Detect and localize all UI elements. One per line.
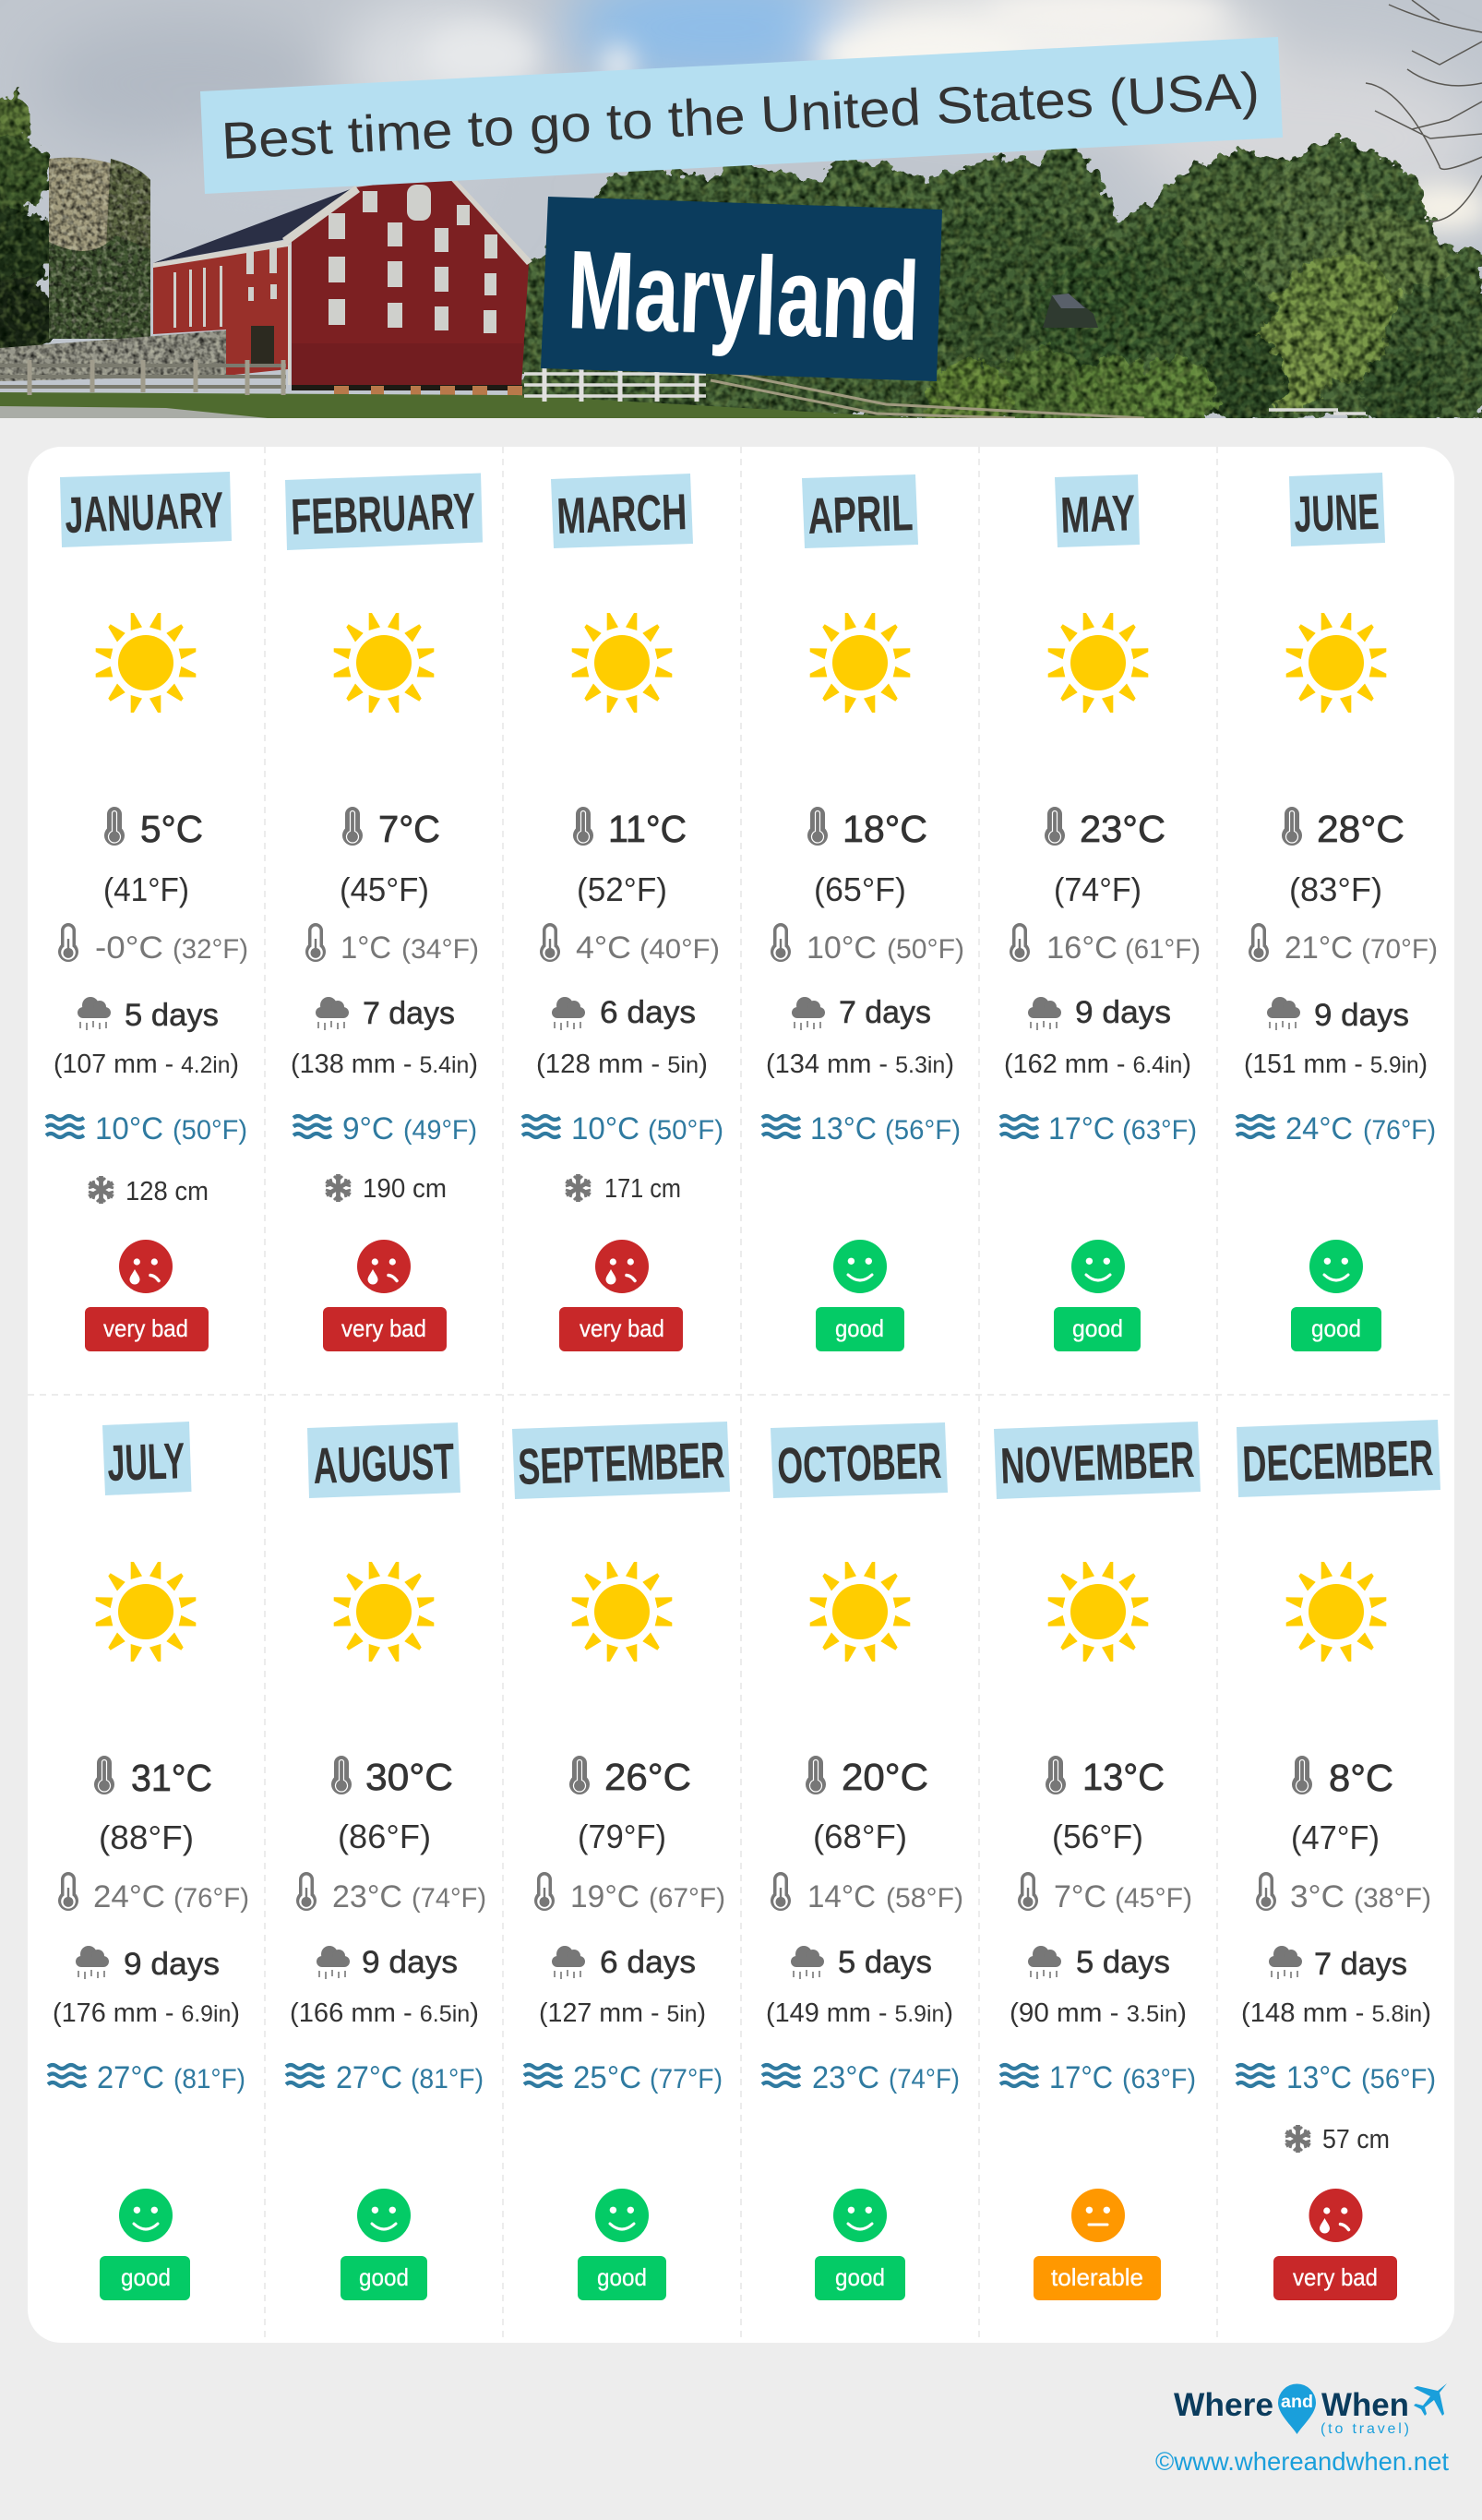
month heading [307, 1422, 460, 1498]
rainy days [552, 1945, 696, 1980]
rainy days: 5 days [838, 1945, 932, 1980]
average temperature [342, 807, 440, 850]
icon: sun [334, 613, 434, 713]
rating badge [1273, 2256, 1397, 2300]
temperature in Fahrenheit: (47°F) [1291, 1818, 1380, 1856]
rainy days: 9 days [1314, 998, 1409, 1033]
snowfall [326, 1174, 447, 1204]
average temperature [806, 1756, 928, 1798]
rainy days: 9 days [362, 1945, 458, 1980]
rating badge: very bad [341, 1314, 426, 1342]
icon: smiling face [833, 1240, 887, 1293]
sea temperature: (76°F) [1363, 1115, 1436, 1146]
panel: March [522, 474, 723, 1351]
temperature in Fahrenheit: (56°F) [1052, 1818, 1143, 1855]
low temperature: (34°F) [401, 934, 479, 965]
sea temperature [524, 2060, 723, 2095]
rating badge: good [835, 1314, 884, 1342]
month heading: FEBRUARY [290, 482, 476, 546]
month heading [1289, 473, 1385, 546]
sea temperature [762, 1111, 961, 1146]
rating badge [1034, 2256, 1161, 2300]
rating badge [323, 1307, 447, 1351]
rating badge: very bad [103, 1314, 188, 1342]
icon: crying face [1309, 2189, 1362, 2242]
snowfall [1285, 2125, 1390, 2154]
red barn [153, 175, 532, 401]
panel: December [1237, 1420, 1440, 2300]
temperature in Fahrenheit: (41°F) [103, 870, 189, 908]
rating badge: good [1311, 1314, 1361, 1342]
average temperature: 13°C [1082, 1756, 1165, 1798]
sky with clouds [0, 0, 1482, 418]
sea temperature [1000, 1111, 1197, 1146]
sea temperature: (56°F) [1361, 2064, 1436, 2094]
panel: February [285, 473, 483, 1351]
stone wall [0, 330, 226, 381]
footer logo: Where and When: When [1321, 2387, 1409, 2423]
rating badge [85, 1307, 209, 1351]
sea temperature: (63°F) [1122, 1115, 1197, 1146]
rainy days [1267, 997, 1409, 1033]
tall tree on the left [0, 92, 55, 360]
icon: crying face [357, 1240, 411, 1293]
average temperature: 18°C [843, 808, 927, 850]
low temperature: (32°F) [173, 934, 248, 965]
temperature in Fahrenheit: (88°F) [99, 1818, 194, 1856]
icon: smiling face [1071, 1240, 1125, 1293]
sea temperature [1000, 2060, 1196, 2095]
rating badge [1291, 1307, 1381, 1351]
average temperature [104, 807, 203, 850]
icon: crying face [595, 1240, 649, 1293]
low temperature: (70°F) [1361, 934, 1438, 965]
icon: sun [1048, 613, 1148, 713]
month heading [994, 1422, 1201, 1499]
sea temperature [1237, 1111, 1436, 1146]
panel: September [512, 1422, 730, 2300]
rainy days: 5 days [1076, 1945, 1170, 1980]
rainy days [1269, 1946, 1407, 1982]
footer logo: Where and When [1174, 2383, 1447, 2437]
rainy days: 7 days [363, 996, 455, 1031]
icon: neutral face [1071, 2189, 1125, 2242]
icon: smiling face [833, 2189, 887, 2242]
rainy days [1028, 995, 1171, 1030]
average temperature: 11°C [608, 808, 687, 850]
icon: smiling face [119, 2189, 173, 2242]
temperature in Fahrenheit: (45°F) [340, 870, 429, 908]
low temperature [1010, 923, 1201, 966]
icon: sun [810, 1562, 910, 1662]
rainy days [792, 995, 931, 1030]
month heading: OCTOBER [776, 1432, 942, 1494]
icon: sun [572, 1562, 672, 1662]
average temperature [1292, 1756, 1393, 1799]
low temperature: 14°C [807, 1879, 876, 1914]
sea temperature [1237, 2060, 1436, 2095]
trees on the right [517, 137, 1482, 443]
rating badge: good [835, 2263, 885, 2291]
low temperature [1018, 1872, 1192, 1914]
sea temperature: (81°F) [411, 2064, 484, 2094]
icon: smiling face [1309, 1240, 1363, 1293]
rainy days [76, 1946, 220, 1982]
temperature in Fahrenheit: (86°F) [338, 1818, 431, 1855]
rainfall: (166 mm - 6.5in) [290, 1998, 479, 2028]
month heading: JANUARY [64, 481, 224, 544]
panel: monthly climate calendar [28, 447, 1454, 2343]
rating badge: tolerable [1051, 2263, 1143, 2291]
rainy days: 5 days [125, 998, 219, 1033]
month heading [512, 1422, 730, 1499]
icon: crying face [119, 1240, 173, 1293]
average temperature [1046, 1756, 1165, 1798]
average temperature: 5°C [140, 808, 203, 850]
rainy days: 9 days [1075, 995, 1171, 1030]
low temperature: (40°F) [639, 934, 720, 965]
rainfall: (128 mm - 5in) [536, 1050, 708, 1079]
month heading: AUGUST [312, 1433, 455, 1494]
icon: sun [96, 613, 196, 713]
month heading: JULY [106, 1432, 185, 1492]
rating badge: good [1072, 1314, 1123, 1342]
sea temperature: (77°F) [650, 2064, 723, 2094]
snowfall: 171 cm [604, 1174, 681, 1204]
icon: sun [1048, 1562, 1148, 1662]
low temperature [771, 923, 964, 966]
low temperature: (45°F) [1115, 1883, 1192, 1914]
rating badge: good [359, 2263, 409, 2291]
footer copyright url: ©www.whereandwhen.net [1155, 2447, 1449, 2476]
rainfall: (134 mm - 5.3in) [766, 1050, 954, 1079]
average temperature [807, 807, 927, 850]
rainy days [791, 1945, 932, 1980]
sea temperature: (49°F) [403, 1115, 477, 1146]
rainfall: (162 mm - 6.4in) [1004, 1050, 1191, 1079]
panel: August [286, 1422, 486, 2300]
rating badge [816, 1307, 904, 1351]
month heading [551, 474, 693, 548]
icon: sun [334, 1562, 434, 1662]
rating badge: very bad [580, 1314, 664, 1342]
month heading [771, 1422, 948, 1498]
average temperature: 23°C [1080, 808, 1165, 850]
low temperature [58, 1872, 249, 1914]
low temperature: 19°C [570, 1879, 639, 1914]
rainy days: 6 days [600, 1945, 696, 1980]
panel: June [1237, 473, 1438, 1351]
panel: July [48, 1422, 249, 2300]
rainfall: (176 mm - 6.9in) [53, 1998, 240, 2028]
average temperature [1045, 807, 1165, 850]
month heading [60, 472, 232, 547]
rainfall: (148 mm - 5.8in) [1241, 1998, 1431, 2028]
low temperature: 23°C [332, 1879, 402, 1914]
low temperature [1249, 923, 1438, 966]
icon: sun [572, 613, 672, 713]
low temperature: -0°C [95, 930, 163, 966]
sea temperature [46, 1111, 247, 1146]
title text: Maryland [566, 226, 922, 364]
temperature in Fahrenheit: (83°F) [1289, 870, 1382, 908]
low temperature: 21°C [1285, 930, 1353, 966]
icon: sun [1286, 613, 1386, 713]
house among the trees [1043, 294, 1098, 328]
rainy days [552, 995, 696, 1030]
rating badge [1054, 1307, 1141, 1351]
bare branches top right [1366, 0, 1482, 222]
temperature in Fahrenheit: (65°F) [814, 870, 906, 908]
snowfall: 190 cm [363, 1174, 447, 1204]
sea temperature [522, 1111, 723, 1146]
footer logo: Where and When: and [1281, 2393, 1313, 2412]
average temperature: 26°C [604, 1756, 691, 1798]
rating badge [578, 2256, 666, 2300]
rainfall: (90 mm - 3.5in) [1010, 1998, 1187, 2028]
panel: April [762, 474, 964, 1351]
title banner [541, 197, 942, 381]
footer logo: Where and When: Where [1174, 2387, 1273, 2423]
low temperature: 24°C [93, 1879, 165, 1914]
panel: May [1000, 474, 1201, 1351]
average temperature [569, 1756, 691, 1798]
low temperature [305, 923, 479, 966]
average temperature [1282, 807, 1404, 850]
rainy days: 7 days [1314, 1947, 1407, 1982]
rainy days: 7 days [839, 995, 931, 1030]
grass and fences [0, 360, 1366, 418]
icon: sun [96, 1562, 196, 1662]
month heading: NOVEMBER [999, 1431, 1195, 1494]
snowfall [566, 1174, 681, 1204]
rainfall: (107 mm - 4.2in) [54, 1050, 239, 1079]
month heading: SEPTEMBER [517, 1431, 725, 1495]
low temperature: 16°C [1046, 930, 1117, 966]
icon: sun [1286, 1562, 1386, 1662]
panel: November [994, 1422, 1201, 2300]
icon: airplane [1414, 2383, 1447, 2416]
month heading [1055, 474, 1140, 547]
low temperature [1256, 1872, 1431, 1914]
sea temperature: (81°F) [173, 2064, 245, 2094]
subtitle text: Best time to go to the United States (USA) [221, 61, 1261, 170]
rainy days: 6 days [600, 995, 696, 1030]
low temperature: (61°F) [1125, 934, 1201, 965]
average temperature: 30°C [365, 1756, 453, 1798]
header photo: barn and trees [0, 0, 1482, 443]
rainy days: 9 days [124, 1947, 220, 1982]
sea temperature: (74°F) [889, 2064, 960, 2094]
sea temperature [762, 2060, 960, 2095]
low temperature: 7°C [1054, 1879, 1106, 1914]
sea temperature: (50°F) [648, 1115, 723, 1146]
sea temperature: 23°C [812, 2060, 879, 2095]
icon: smiling face [357, 2189, 411, 2242]
month heading [102, 1422, 192, 1495]
snowfall: 128 cm [125, 1177, 209, 1206]
month heading [802, 474, 918, 548]
sea temperature: 17°C [1049, 2060, 1113, 2095]
sea temperature: (50°F) [173, 1115, 247, 1146]
panel: January [46, 472, 248, 1351]
low temperature [771, 1872, 963, 1914]
sea temperature [286, 2060, 484, 2095]
low temperature [58, 923, 248, 966]
rainy days [316, 996, 455, 1031]
average temperature [94, 1756, 212, 1799]
rating badge [341, 2256, 427, 2300]
rainy days [317, 1945, 458, 1980]
snowfall [89, 1176, 209, 1206]
rainfall: (149 mm - 5.9in) [766, 1998, 953, 2028]
rating badge: good [597, 2263, 647, 2291]
sea temperature: (56°F) [885, 1115, 961, 1146]
sea temperature: 17°C [1048, 1111, 1115, 1146]
average temperature: 8°C [1329, 1757, 1393, 1799]
sea temperature: 13°C [1286, 2060, 1352, 2095]
rating badge: good [121, 2263, 171, 2291]
average temperature: 28°C [1317, 808, 1404, 850]
sea temperature [48, 2060, 245, 2095]
rainfall: (151 mm - 5.9in) [1244, 1050, 1428, 1079]
low temperature: (76°F) [173, 1883, 249, 1914]
rating badge [559, 1307, 683, 1351]
low temperature [534, 1872, 725, 1914]
low temperature: (74°F) [412, 1883, 486, 1914]
rating badge [100, 2256, 190, 2300]
temperature in Fahrenheit: (68°F) [813, 1818, 907, 1855]
average temperature: 31°C [131, 1757, 212, 1799]
rating badge: very bad [1293, 2263, 1378, 2291]
rating badge [815, 2256, 905, 2300]
sea temperature: 10°C [571, 1111, 639, 1146]
rainfall: (127 mm - 5in) [539, 1998, 706, 2028]
month heading: JUNE [1293, 483, 1380, 543]
rainy days [78, 997, 219, 1033]
sea temperature: 24°C [1285, 1111, 1353, 1146]
low temperature: (50°F) [887, 934, 964, 965]
low temperature [296, 1872, 486, 1914]
average temperature [573, 807, 687, 850]
snowfall: 57 cm [1322, 2125, 1390, 2154]
low temperature: 10°C [807, 930, 877, 966]
icon: location pin [1278, 2383, 1316, 2434]
temperature in Fahrenheit: (79°F) [578, 1818, 666, 1855]
icon: sun [810, 613, 910, 713]
temperature in Fahrenheit: (52°F) [577, 870, 667, 908]
average temperature: 20°C [842, 1756, 928, 1798]
low temperature: 1°C [341, 930, 391, 966]
low temperature: 3°C [1290, 1879, 1345, 1914]
sea temperature: 9°C [342, 1111, 394, 1146]
panel: October [762, 1422, 963, 2300]
sea temperature: 27°C [97, 2060, 164, 2095]
low temperature: 4°C [576, 930, 631, 966]
month heading: MARCH [556, 483, 687, 545]
footer logo: Where and When: (to travel) [1321, 2421, 1409, 2437]
sea temperature: 13°C [810, 1111, 877, 1146]
icon: smiling face [595, 2189, 649, 2242]
rainfall: (138 mm - 5.4in) [291, 1050, 478, 1079]
average temperature: 7°C [378, 808, 440, 850]
temperature in Fahrenheit: (74°F) [1054, 870, 1141, 908]
sea temperature: 25°C [573, 2060, 641, 2095]
month heading: MAY [1059, 484, 1136, 544]
sea temperature: (63°F) [1122, 2064, 1196, 2094]
sea temperature: 27°C [336, 2060, 402, 2095]
low temperature: (67°F) [649, 1883, 725, 1914]
month heading: APRIL [807, 484, 914, 545]
low temperature: (38°F) [1354, 1883, 1431, 1914]
low temperature [540, 923, 720, 966]
stone and ivy silo [49, 158, 150, 339]
sea temperature [293, 1111, 477, 1146]
average temperature [331, 1756, 453, 1798]
low temperature: (58°F) [886, 1883, 963, 1914]
rainy days [1028, 1945, 1170, 1980]
month heading [285, 473, 483, 550]
subtitle banner [200, 37, 1283, 194]
sea temperature: 10°C [95, 1111, 163, 1146]
